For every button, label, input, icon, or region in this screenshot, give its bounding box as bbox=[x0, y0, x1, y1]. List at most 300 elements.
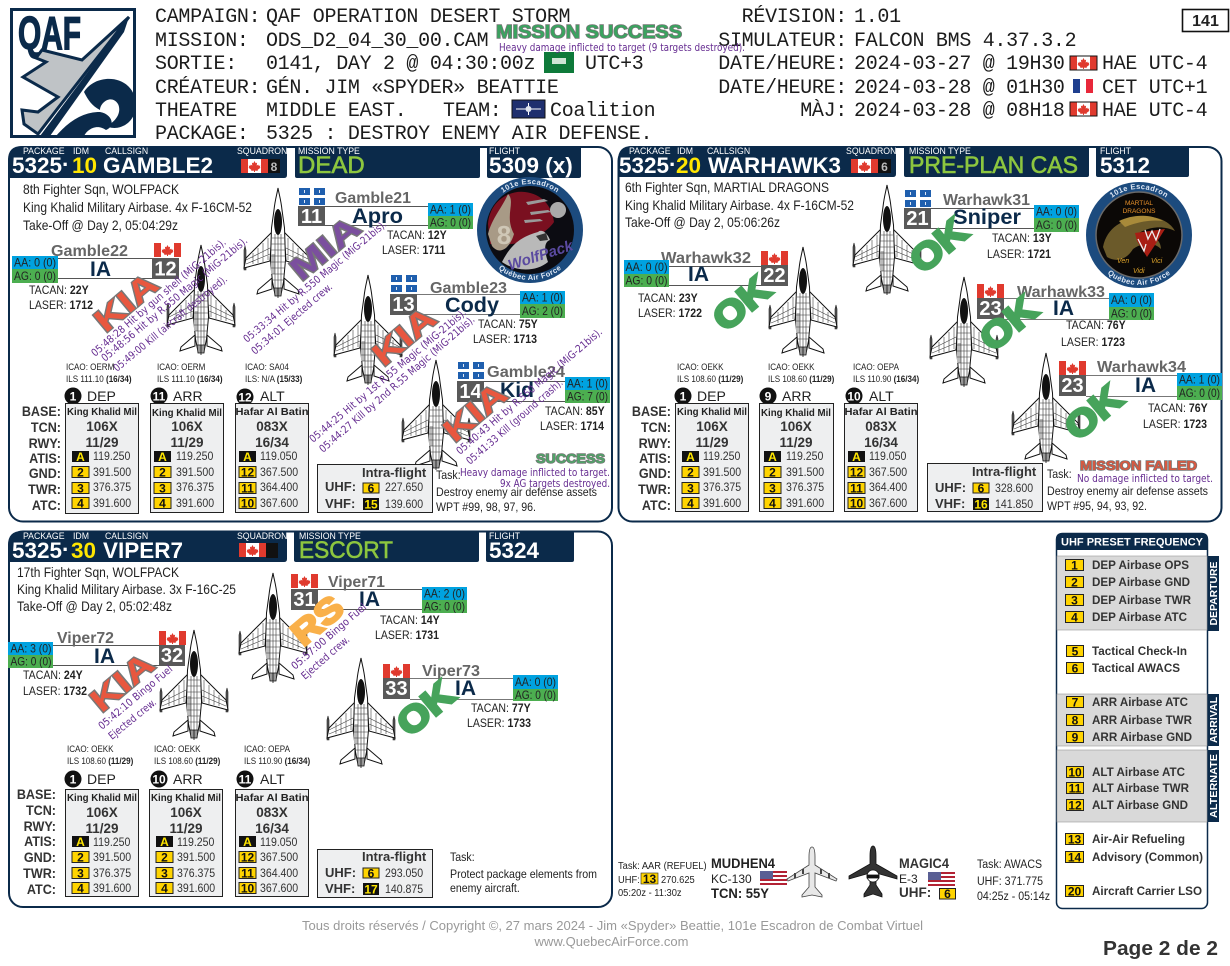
pilot card: Warhawk34: AA: 1 (0) bbox=[1179, 372, 1220, 386]
pilot card: Gamble24 Kid: AG: 7 (0) bbox=[567, 390, 608, 404]
footer: copyright: www.QuebecAirForce.com bbox=[534, 934, 688, 949]
pilot card: Viper73: AG: 0 (0) bbox=[515, 688, 556, 702]
flight result: mission failed: MISSION FAILED bbox=[1080, 458, 1197, 473]
airfield: alternate Hafar Al Batin: 367.500 bbox=[260, 466, 298, 479]
airfield: alternate Hafar Al Batin: 16/34 bbox=[864, 435, 898, 450]
airfield table labels: ATIS: bbox=[639, 450, 671, 466]
panel header: Warhawk3: MISSION TYPE bbox=[909, 146, 971, 156]
airfield: arrival King Khalid: ICAO: OEKK bbox=[768, 361, 815, 372]
airfield: arrival King Khalid: 391.600 bbox=[786, 497, 824, 510]
pilot card: Gamble24 Kid: Gamble24 bbox=[487, 364, 565, 381]
pilot card: Viper71: Viper71 bbox=[328, 574, 385, 591]
panel header: Warhawk3: WARHAWK3 bbox=[708, 153, 841, 178]
airfield: arrival King Khalid: 106X bbox=[780, 419, 812, 434]
airfield: arrival King Khalid: 376.375 bbox=[786, 481, 824, 494]
pilot card: Gamble24 Kid bbox=[457, 362, 610, 433]
panel header: Gamble2: 10 bbox=[72, 153, 97, 178]
panel header: Gamble2: DEAD bbox=[298, 152, 365, 179]
header: revision and dates right bbox=[718, 5, 1208, 123]
airfield: alternate Hafar Al Batin bbox=[236, 361, 308, 512]
airfield: alternate Hafar Al Batin: 10 bbox=[241, 496, 254, 510]
pilot card: Gamble23 Cody: AA: 1 (0) bbox=[522, 290, 563, 304]
pilot card: Viper73: Viper73 bbox=[422, 663, 480, 680]
airfield: arrival King Khalid: 4 bbox=[161, 882, 168, 896]
task text: Protect package elements from bbox=[450, 867, 597, 881]
pilot card: Warhawk33: AA: 0 (0) bbox=[1111, 293, 1152, 307]
airfield: alternate Hafar Al Batin: 367.500 bbox=[869, 466, 907, 479]
section: tactical: Tactical AWACS bbox=[1092, 661, 1180, 675]
airfield: alternate Hafar Al Batin: 367.600 bbox=[260, 882, 298, 895]
section: arrival: ARR Airbase TWR bbox=[1092, 713, 1192, 727]
pilot card: Warhawk32: 22 bbox=[763, 265, 786, 287]
pilot card: Gamble21 Apro: Apro bbox=[352, 205, 403, 228]
support: AWACS Magic4: E-3 bbox=[899, 872, 918, 886]
combat log: Gamble23: 05:44:25 Hit by 1st R.55 Magic (MiG-21bis). bbox=[307, 307, 469, 445]
aircraft: Warhawk32 bbox=[769, 247, 837, 357]
pilot card: Viper72: TACAN: 24Y bbox=[23, 669, 83, 682]
panel header: Gamble2: PACKAGE bbox=[23, 146, 65, 156]
combat log: Gamble21: 05:33:34 Hit by R.550 Magic (MiG-21bis). bbox=[241, 218, 389, 345]
section: departure: DEP Airbase ATC bbox=[1092, 610, 1187, 624]
airfield: arrival King Khalid: ILS 111.10 (16/34) bbox=[157, 373, 223, 384]
airfield: alternate Hafar Al Batin: 12 bbox=[238, 390, 252, 404]
squadron badge: Wolfpack: 8 bbox=[497, 220, 511, 250]
combat log: Gamble24: 05:40:43 Hit by R.550 Magic (MiG-21bis). bbox=[454, 326, 605, 457]
airfield: alternate Hafar Al Batin bbox=[844, 361, 919, 512]
flight unit information bbox=[17, 564, 236, 614]
airfield: alternate Hafar Al Batin bbox=[236, 743, 310, 896]
airfield: departure King Khalid: 119.250 bbox=[93, 836, 130, 849]
pilot card: Viper73: AA: 0 (0) bbox=[515, 675, 556, 689]
airfield table labels: GND: bbox=[24, 849, 56, 865]
pilot card: Viper73: TACAN: 77Y bbox=[471, 702, 531, 715]
airfield: alternate Hafar Al Batin: ICAO: SA04 bbox=[245, 361, 289, 372]
panel header: Gamble2: IDM bbox=[73, 146, 89, 156]
panel header: Viper7: · bbox=[62, 537, 70, 562]
pilot card: Gamble24 Kid: Kid bbox=[500, 379, 534, 402]
airfield: arrival King Khalid: 4 bbox=[159, 496, 166, 510]
panel header: Viper7: SQUADRON bbox=[237, 531, 287, 541]
panel header: Viper7: MISSION TYPE bbox=[299, 531, 361, 541]
airfield table labels bbox=[17, 786, 56, 897]
pilot card: Viper71: 31 bbox=[293, 589, 316, 611]
pilot card: Warhawk33: 23 bbox=[979, 298, 1002, 320]
status: Warhawk34 OK: OK bbox=[1056, 377, 1130, 448]
header: revision and dates right: RÉVISION: bbox=[742, 5, 847, 29]
airfield: alternate Hafar Al Batin: ALT bbox=[260, 771, 285, 787]
intra-flight frequencies: 293.050 bbox=[385, 867, 423, 880]
header: mission information left: MISSION: bbox=[155, 30, 249, 53]
header: revision and dates right: SIMULATEUR: bbox=[718, 30, 847, 53]
pilot card: Viper72: 32 bbox=[161, 645, 183, 667]
support: AWACS Magic4: UHF: bbox=[899, 885, 931, 900]
sortie number box: 141 bbox=[1192, 13, 1219, 30]
status: Gamble22 KIA: KIA bbox=[87, 265, 165, 339]
airfield: arrival King Khalid: 2 bbox=[159, 466, 166, 480]
pilot card: Warhawk34: Warhawk34 bbox=[1097, 359, 1186, 376]
airfield table labels: RWY: bbox=[24, 818, 56, 834]
section: arrival: 7 bbox=[1072, 696, 1079, 710]
pilot card: Gamble22: LASER: 1712 bbox=[29, 299, 93, 312]
airfield: alternate Hafar Al Batin: 083X bbox=[256, 419, 288, 434]
support: AWACS Magic4 bbox=[899, 856, 956, 901]
pilot card: Warhawk32: LASER: 1722 bbox=[638, 307, 702, 320]
airfield: alternate Hafar Al Batin: A bbox=[243, 450, 252, 464]
status: Viper71 RS: RS bbox=[284, 588, 351, 653]
section: departure: 4 bbox=[1071, 610, 1078, 624]
header: mission information left: SORTIE: bbox=[155, 53, 237, 76]
status: Viper73 OK: OK bbox=[388, 673, 462, 744]
header: mission information left: TEAM: bbox=[443, 100, 502, 123]
panel header: Viper7: FLIGHT bbox=[489, 531, 520, 541]
airfield: alternate Hafar Al Batin: 11 bbox=[850, 482, 863, 496]
airfield: alternate Hafar Al Batin: 364.400 bbox=[260, 481, 298, 494]
airfield: arrival King Khalid: 106X bbox=[171, 419, 203, 434]
airfield table labels: TCN: bbox=[641, 419, 671, 435]
section: tactical bbox=[1066, 644, 1187, 676]
airfield table labels: RWY: bbox=[29, 435, 61, 451]
panel header: Gamble2: SQUADRON bbox=[237, 146, 287, 156]
pilot card: Warhawk32: Warhawk32 bbox=[661, 250, 751, 267]
airfield table labels: TCN: bbox=[31, 419, 61, 435]
pilot card: Warhawk34: 23 bbox=[1061, 375, 1084, 397]
pilot card: Viper72: AG: 0 (0) bbox=[10, 654, 52, 668]
pilot card: Gamble22: TACAN: 22Y bbox=[29, 284, 89, 297]
airfield: alternate Hafar Al Batin: 11 bbox=[241, 866, 254, 880]
header: mission information left: QAF OPERATION DESERT STORM bbox=[266, 6, 570, 29]
support: tanker Mudhen4: KC-130 bbox=[711, 872, 752, 886]
combat log: Viper72: 05:42:10 Bingo Fuel bbox=[96, 663, 175, 732]
combat log: Gamble23: 05:44:27 Kill by 2nd R.55 Magic (MiG-21bis). bbox=[317, 314, 477, 455]
header: mission information left: GÉN. JIM «SPYDER» BEATTIE bbox=[266, 76, 559, 100]
combat log: Gamble22: 05:49:00 Kill (aircraft destroyed). bbox=[111, 273, 230, 374]
pilot card: Viper71: IA bbox=[359, 588, 380, 611]
panel header: Warhawk3: 20 bbox=[676, 153, 701, 178]
aircraft: Viper73 bbox=[327, 658, 395, 768]
pilot card: Viper73: LASER: 1733 bbox=[467, 717, 531, 730]
airfield: departure King Khalid: ILS 108.60 (11/29) bbox=[677, 373, 743, 384]
section: arrival: ARR Airbase GND bbox=[1092, 730, 1192, 744]
sortie number box bbox=[1182, 10, 1228, 32]
pilot card: Warhawk33: IA bbox=[1053, 297, 1074, 320]
intra-flight frequencies bbox=[928, 464, 1042, 512]
support: AWACS Magic4: 6 bbox=[944, 887, 951, 901]
pilot card: Viper71: LASER: 1731 bbox=[375, 629, 439, 642]
pilot card: Warhawk33 bbox=[977, 284, 1154, 349]
airfield: alternate Hafar Al Batin: 12 bbox=[850, 466, 863, 480]
pilot card: Gamble22 bbox=[12, 243, 181, 312]
panel header: Viper7: CALLSIGN bbox=[105, 531, 148, 541]
pilot card: Warhawk34: AG: 0 (0) bbox=[1179, 386, 1220, 400]
airfield: arrival King Khalid: 391.500 bbox=[786, 466, 824, 479]
squadron badge: Wolfpack: Québec Air Force bbox=[499, 266, 561, 280]
intra-flight frequencies: VHF: bbox=[325, 496, 355, 511]
airfield: alternate Hafar Al Batin: 119.050 bbox=[869, 450, 906, 463]
airfield: arrival King Khalid: King Khalid Mil bbox=[151, 792, 221, 804]
airfield: alternate Hafar Al Batin: ILS 110.90 (16/34) bbox=[853, 373, 919, 384]
panel header: Gamble2: MISSION TYPE bbox=[298, 146, 360, 156]
airfield: alternate Hafar Al Batin: 119.050 bbox=[260, 450, 297, 463]
footer: copyright: Tous droits réservés / Copyright ©, 27 mars 2024 - Jim «Spyder» Beattie, 101e Escadron de Combat Virtuel bbox=[302, 918, 923, 933]
airfield: arrival King Khalid: ILS 108.60 (11/29) bbox=[768, 373, 834, 384]
panel header: Warhawk3: · bbox=[669, 152, 676, 177]
section: other presets bbox=[1066, 832, 1203, 898]
flight result: success: SUCCESS bbox=[536, 451, 605, 466]
pilot card: Warhawk32 bbox=[624, 250, 788, 320]
intra-flight frequencies: Intra-flight bbox=[972, 464, 1037, 479]
airfield: arrival King Khalid: A bbox=[158, 450, 167, 464]
airfield table labels bbox=[632, 403, 671, 513]
combat log: Viper72: Ejected crew. bbox=[106, 697, 159, 742]
support: tanker Mudhen4 bbox=[711, 856, 787, 901]
airfield: departure King Khalid: 1 bbox=[70, 772, 77, 786]
airfield: arrival King Khalid: 11/29 bbox=[170, 435, 204, 450]
airfield: departure King Khalid: 106X bbox=[86, 805, 118, 820]
airfield: alternate Hafar Al Batin: 364.400 bbox=[869, 481, 907, 494]
airfield: departure King Khalid: ICAO: OEKK bbox=[67, 743, 114, 754]
airfield: arrival King Khalid: 11 bbox=[153, 390, 166, 404]
intra-flight frequencies: 16 bbox=[974, 498, 988, 512]
airfield: departure King Khalid: ICAO: OEKK bbox=[677, 361, 724, 372]
task text: Destroy enemy air defense assets bbox=[1047, 484, 1208, 498]
airfield: alternate Hafar Al Batin: 083X bbox=[256, 805, 288, 820]
pilot card: Viper71: AG: 0 (0) bbox=[424, 600, 465, 614]
flight unit information bbox=[625, 179, 854, 230]
airfield: alternate Hafar Al Batin: 119.050 bbox=[260, 836, 297, 849]
airfield: arrival King Khalid: ICAO: OERM bbox=[157, 361, 205, 372]
flight result: success: Heavy damage inflicted to target. bbox=[460, 467, 610, 479]
airfield: departure King Khalid: A bbox=[76, 835, 85, 849]
UHF heading: UHF PRESET FREQUENCY bbox=[1061, 536, 1204, 548]
icon: tanker aircraft bbox=[787, 847, 837, 897]
airfield: alternate Hafar Al Batin: 11 bbox=[241, 482, 254, 496]
intra-flight frequencies: UHF: bbox=[325, 479, 356, 494]
airfield: arrival King Khalid: 3 bbox=[769, 482, 776, 496]
panel header: Viper7: ESCORT bbox=[299, 537, 393, 564]
airfield: departure King Khalid: 106X bbox=[86, 419, 118, 434]
airfield: alternate Hafar Al Batin: ICAO: OEPA bbox=[244, 743, 290, 754]
header: revision and dates right: HAE UTC-4 bbox=[1102, 100, 1207, 123]
airfield: arrival King Khalid: 119.250 bbox=[176, 450, 213, 463]
panel header: Viper7: 5325 bbox=[12, 538, 62, 563]
pilot card: Gamble23 Cody: Cody bbox=[445, 294, 499, 317]
task text bbox=[1047, 468, 1208, 513]
intra-flight frequencies: UHF: bbox=[325, 865, 356, 880]
airfield: departure King Khalid bbox=[674, 361, 748, 512]
airfield: departure King Khalid: 376.375 bbox=[93, 481, 131, 494]
panel header: Viper7: VIPER7 bbox=[103, 538, 183, 563]
panel header: Warhawk3: PRE-PLAN CAS bbox=[909, 152, 1078, 179]
aircraft: Viper71 bbox=[239, 573, 307, 683]
section: arrival bbox=[1057, 694, 1220, 746]
aircraft: Viper72 bbox=[160, 630, 228, 740]
airfield: alternate Hafar Al Batin: 10 bbox=[850, 496, 863, 510]
panel header: Viper7 bbox=[8, 531, 574, 564]
status: Warhawk32 OK: OK bbox=[704, 268, 778, 339]
airfield: departure King Khalid: 3 bbox=[687, 482, 694, 496]
airfield: arrival King Khalid: A bbox=[768, 450, 777, 464]
status: Viper72 KIA: KIA bbox=[83, 645, 161, 719]
section: alternate: 12 bbox=[1068, 798, 1082, 812]
pilot card: Warhawk34: TACAN: 76Y bbox=[1148, 402, 1208, 415]
intra-flight frequencies: 15 bbox=[364, 498, 378, 512]
panel header: Gamble2: · bbox=[62, 152, 70, 177]
aircraft: Gamble22 bbox=[167, 245, 235, 355]
panel header: Warhawk3: CALLSIGN bbox=[707, 146, 750, 156]
task text bbox=[436, 469, 597, 514]
combat log: Gamble22: 05:48:28 Hit by gun shell (MiG-21bis). bbox=[89, 236, 229, 359]
task text: Task: bbox=[1047, 468, 1072, 481]
panel header: Gamble2: 8 bbox=[271, 160, 278, 174]
airfield: departure King Khalid: 4 bbox=[687, 496, 694, 510]
header: revision and dates right: MÀJ: bbox=[800, 99, 847, 123]
airfield: arrival King Khalid: King Khalid Mil bbox=[152, 407, 222, 419]
section: other presets: Air-Air Refueling bbox=[1092, 832, 1185, 846]
section: alternate: ALT Airbase GND bbox=[1092, 798, 1188, 812]
status: Warhawk33 OK: OK bbox=[971, 288, 1045, 359]
panel header: Viper7: PACKAGE bbox=[23, 531, 65, 541]
pilot card: Warhawk31 Sniper: AG: 0 (0) bbox=[1036, 218, 1077, 232]
airfield: arrival King Khalid: A bbox=[160, 835, 169, 849]
airfield: departure King Khalid: King Khalid Mil bbox=[677, 406, 747, 418]
section: departure bbox=[1057, 556, 1220, 631]
intra-flight frequencies: VHF: bbox=[325, 881, 355, 896]
pilot card: Warhawk33: AG: 0 (0) bbox=[1111, 306, 1152, 320]
airfield: arrival King Khalid bbox=[150, 361, 224, 512]
logo: QAF bbox=[12, 7, 136, 136]
airfield: departure King Khalid: 391.600 bbox=[93, 882, 131, 895]
header: mission information left: ODS_D2_04_30_00.CAM bbox=[266, 30, 488, 53]
airfield: alternate Hafar Al Batin: 367.500 bbox=[260, 851, 298, 864]
pilot card: Warhawk34: LASER: 1723 bbox=[1143, 418, 1207, 431]
aircraft: Gamble23 bbox=[334, 275, 402, 385]
pilot card: Warhawk33: Warhawk33 bbox=[1017, 284, 1105, 301]
airfield table labels: ATIS: bbox=[24, 833, 56, 849]
pilot card: Warhawk34 bbox=[1059, 359, 1222, 431]
panel header: Warhawk3: 5312 bbox=[1100, 153, 1150, 178]
pilot card: Gamble23 Cody: Gamble23 bbox=[430, 280, 507, 297]
task text: enemy aircraft. bbox=[450, 882, 520, 895]
support: AWACS task info bbox=[977, 859, 1050, 903]
airfield: alternate Hafar Al Batin: ILS: N/A (15/33) bbox=[245, 373, 302, 384]
flight unit information: 8th Fighter Sqn, WOLFPACK bbox=[23, 181, 180, 197]
support: AWACS Magic4: MAGIC4 bbox=[899, 856, 949, 871]
pilot card: Gamble22: AG: 0 (0) bbox=[14, 269, 56, 283]
pilot card: Gamble24 Kid: TACAN: 85Y bbox=[545, 405, 605, 418]
flight unit information: King Khalid Military Airbase. 4x F-16CM-52 bbox=[625, 197, 854, 213]
aircraft: Warhawk33 bbox=[930, 277, 998, 387]
header: revision and dates right: CET UTC+1 bbox=[1102, 77, 1208, 100]
pilot card: Viper73: IA bbox=[455, 677, 476, 700]
section: other presets: 20 bbox=[1068, 884, 1081, 898]
squadron badge: Martial Dragons: DRAGONS bbox=[1123, 208, 1156, 215]
pilot card: Gamble21 Apro bbox=[298, 188, 473, 257]
section: arrival: ARRIVAL bbox=[1208, 696, 1220, 743]
panel header: Warhawk3: SQUADRON bbox=[846, 146, 896, 156]
flight unit information: 6th Fighter Sqn, MARTIAL DRAGONS bbox=[625, 179, 829, 195]
UHF heading bbox=[1056, 533, 1208, 550]
airfield: arrival King Khalid: 3 bbox=[161, 866, 168, 880]
airfield: departure King Khalid: 106X bbox=[696, 419, 728, 434]
pilot card: Viper72: Viper72 bbox=[57, 630, 114, 647]
squadron badge: Wolfpack: WolfPack bbox=[506, 237, 576, 274]
panel header: Gamble2: FLIGHT bbox=[489, 146, 520, 156]
section: alternate bbox=[1057, 750, 1220, 822]
airfield: arrival King Khalid: ICAO: OEKK bbox=[154, 743, 201, 754]
combat log: Gamble22: 05:48:56 Hit by R.550 Magic (MiG-21bis). bbox=[99, 235, 250, 364]
flight unit information: King Khalid Military Airbase. 3x F-16C-25 bbox=[17, 581, 236, 597]
airfield: arrival King Khalid: King Khalid Mil bbox=[761, 407, 831, 419]
airfield table labels: GND: bbox=[639, 465, 671, 481]
intra-flight frequencies bbox=[318, 464, 432, 512]
section: arrival: 9 bbox=[1072, 730, 1079, 744]
panel header: Gamble2: CALLSIGN bbox=[105, 146, 148, 156]
combat log: Gamble24: 05:41:33 Kill (ground crash). bbox=[464, 377, 566, 467]
pilot card: Gamble21 Apro: AA: 1 (0) bbox=[430, 202, 471, 216]
intra-flight frequencies: 6 bbox=[368, 482, 375, 496]
squadron badge: Martial Dragons: MARTIAL bbox=[1125, 200, 1153, 207]
airfield: alternate Hafar Al Batin: Hafar Al Batin bbox=[844, 406, 918, 418]
header: revision and dates right: DATE/HEURE: bbox=[718, 53, 847, 76]
airfield: arrival King Khalid: ILS 108.60 (11/29) bbox=[154, 755, 220, 766]
pilot card: Viper72: LASER: 1732 bbox=[23, 685, 87, 698]
airfield table labels: BASE: bbox=[632, 403, 671, 419]
status: Gamble24 KIA: KIA bbox=[436, 375, 514, 449]
aircraft: Gamble21 bbox=[244, 188, 312, 298]
pilot card: Gamble24 Kid: AA: 1 (0) bbox=[567, 376, 608, 390]
intra-flight frequencies: Intra-flight bbox=[362, 849, 427, 864]
pilot card: Gamble21 Apro: AG: 0 (0) bbox=[430, 216, 471, 230]
section: other presets: 14 bbox=[1068, 850, 1081, 864]
icon: AWACS aircraft bbox=[849, 846, 897, 897]
airfield: departure King Khalid: 3 bbox=[77, 482, 84, 496]
panel header: Gamble2: GAMBLE2 bbox=[103, 153, 213, 178]
panel header: Gamble2: 5325 bbox=[12, 153, 62, 178]
task text: WPT #99, 98, 97, 96. bbox=[436, 500, 536, 514]
support: tanker Mudhen4: MUDHEN4 bbox=[711, 856, 775, 871]
section: other presets: Aircraft Carrier LSO bbox=[1092, 884, 1202, 898]
support: AWACS task info: 04:25z - 05:14z bbox=[977, 891, 1050, 903]
pilot card: Gamble22: Gamble22 bbox=[51, 243, 128, 260]
pilot card: Gamble24 Kid: LASER: 1714 bbox=[540, 420, 605, 433]
pilot card: Gamble23 Cody bbox=[390, 275, 565, 346]
section: departure: DEP Airbase GND bbox=[1092, 575, 1190, 589]
section: departure: DEP Airbase TWR bbox=[1092, 593, 1191, 607]
airfield table labels: GND: bbox=[29, 465, 61, 481]
section: departure: DEP Airbase OPS bbox=[1092, 558, 1189, 572]
section: arrival: ARR Airbase ATC bbox=[1092, 695, 1188, 709]
pilot card: Warhawk31 Sniper: AA: 0 (0) bbox=[1036, 204, 1077, 218]
pilot card: Viper72 bbox=[8, 630, 186, 698]
airfield: arrival King Khalid: ARR bbox=[173, 388, 203, 404]
squadron badge: Wolfpack bbox=[477, 177, 583, 283]
section: other presets: 13 bbox=[1068, 832, 1081, 846]
pilot card: Warhawk31 Sniper: TACAN: 13Y bbox=[992, 232, 1052, 245]
section: departure: DEPARTURE bbox=[1208, 562, 1220, 626]
status: Warhawk31 OK: OK bbox=[901, 210, 975, 281]
pilot card: Warhawk32: AG: 0 (0) bbox=[626, 274, 668, 288]
airfield: departure King Khalid: 11/29 bbox=[85, 821, 119, 836]
airfield: arrival King Khalid: 2 bbox=[161, 850, 168, 864]
pilot card: Gamble23 Cody: LASER: 1713 bbox=[473, 333, 537, 346]
section: alternate: 11 bbox=[1069, 782, 1082, 796]
airfield: alternate Hafar Al Batin: 12 bbox=[241, 850, 254, 864]
support: tanker Mudhen4: TCN: 55Y bbox=[711, 885, 770, 901]
header: revision and dates right: 1.01 bbox=[854, 6, 901, 29]
pilot card: Warhawk31 Sniper: Sniper bbox=[953, 206, 1021, 229]
pilot card: Warhawk32: TACAN: 23Y bbox=[638, 292, 698, 305]
header: mission information left: PACKAGE: bbox=[155, 123, 249, 146]
